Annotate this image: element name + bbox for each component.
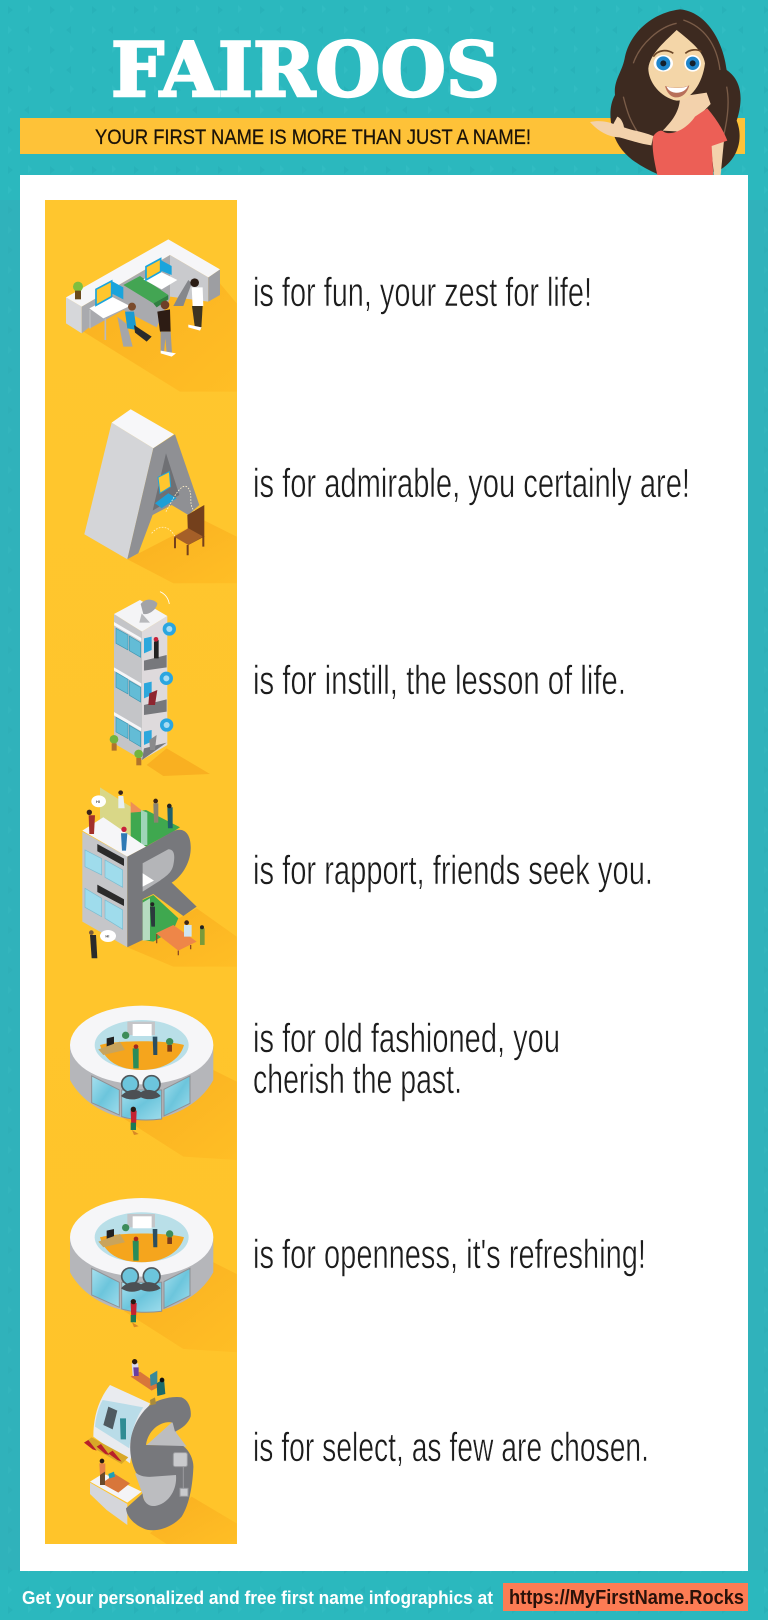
- shirt: [653, 108, 727, 175]
- tagline banner: [20, 118, 745, 154]
- counter: [82, 255, 170, 333]
- illustration F: office desks: [66, 239, 237, 392]
- chair: [174, 505, 204, 555]
- monitors: [96, 281, 112, 305]
- illustration S: letter building: [84, 1359, 237, 1544]
- walking person: [131, 1107, 139, 1135]
- illustration O second: ring building: [70, 1198, 237, 1352]
- text line F: is for fun, your zest for life!: [253, 269, 592, 315]
- signs: [97, 844, 124, 906]
- text line I: is for instill, the lesson of life.: [253, 657, 626, 703]
- right face of letter A: [127, 434, 199, 559]
- tagline banner: YOUR FIRST NAME IS MORE THAN JUST A NAME!: [95, 126, 531, 149]
- counter fills of letter S: [135, 1422, 187, 1507]
- footer url badge: https://MyFirstName.Rocks: [509, 1587, 744, 1609]
- dashed wire: [152, 486, 195, 537]
- top desk and people: [131, 1359, 165, 1405]
- illustration I: tower building: [110, 592, 210, 776]
- illustration A: letter building: [84, 409, 237, 583]
- glasses and moustache: [121, 1268, 161, 1292]
- lower block: [90, 1483, 127, 1525]
- standing person: [157, 301, 176, 357]
- ring side: [70, 1237, 213, 1312]
- top of letter A: [112, 409, 174, 448]
- courtyard people and plants: [98, 1032, 173, 1068]
- plant: [73, 282, 83, 299]
- text line O: is for old fashioned, you: [253, 1015, 560, 1061]
- ground floor: [143, 895, 178, 942]
- white desks: [89, 297, 130, 318]
- glasses and moustache: [121, 1076, 161, 1099]
- letter R face: [127, 830, 197, 947]
- top: [82, 817, 146, 857]
- right arm: [711, 141, 724, 175]
- title: FAIROOS: [111, 26, 500, 114]
- yellow illustration column: [45, 200, 237, 1544]
- satellite dish: [139, 592, 169, 623]
- screen: [155, 472, 177, 508]
- inner courtyard: [95, 1212, 189, 1262]
- footer promo text: Get your personalized and free first name infographics at: [22, 1587, 493, 1608]
- blue bubbles: [160, 622, 176, 732]
- lower desk and person: [99, 1459, 130, 1493]
- green roof: [131, 810, 180, 847]
- awning: [84, 1437, 128, 1464]
- left face: [82, 832, 127, 947]
- text line O: [253, 1015, 560, 1102]
- neck and chest: [663, 93, 711, 132]
- balcony floors: [144, 655, 167, 715]
- glass panels: [92, 1268, 190, 1312]
- wall device: [173, 1453, 188, 1496]
- illustration R: letter building: [82, 787, 237, 967]
- walking person: [131, 1299, 139, 1327]
- ring top: [70, 1006, 213, 1084]
- speech bubbles: HI: [96, 799, 100, 804]
- people: [87, 790, 205, 958]
- ring top: [70, 1198, 213, 1277]
- green desk: [123, 276, 168, 303]
- windows: [116, 628, 141, 747]
- face: [648, 30, 705, 101]
- inner courtyard: [95, 1020, 189, 1070]
- man with white shirt: [173, 278, 203, 331]
- ring side: [70, 1045, 213, 1120]
- letter S face: [126, 1397, 193, 1530]
- windows: [85, 850, 123, 929]
- text line O: cherish the past.: [253, 1056, 462, 1102]
- speech bubbles: [91, 795, 116, 942]
- orange table: [156, 925, 197, 955]
- illustration O: ring building: [70, 1006, 237, 1160]
- hair: [610, 9, 741, 174]
- seated person: [117, 303, 152, 347]
- courtyard people and plants: [98, 1224, 173, 1261]
- plants: [110, 735, 143, 765]
- arm: [590, 117, 653, 145]
- upper body: [93, 1385, 150, 1463]
- occupants: [144, 637, 159, 750]
- speech bubbles: HI: [105, 934, 109, 939]
- illustration: woman character: [590, 9, 741, 175]
- smile: [665, 85, 689, 97]
- left face of letter A: [84, 423, 153, 559]
- glass panels: [92, 1076, 190, 1120]
- eyes: [653, 50, 701, 72]
